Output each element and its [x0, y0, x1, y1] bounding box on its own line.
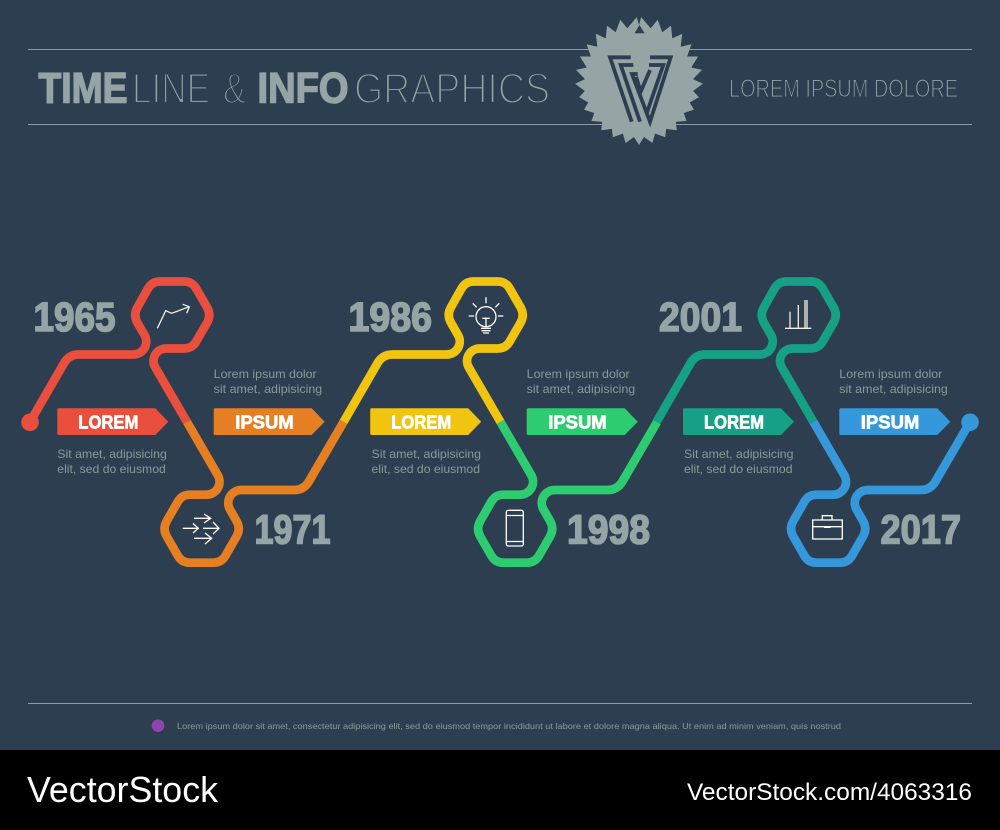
- year 2017: 2017: [880, 506, 961, 552]
- text block below red: elit, sed do eiusmod: [57, 462, 166, 476]
- timeline segment: green 1998: [478, 422, 657, 563]
- text block above orange: sit amet, adipisicing: [214, 382, 322, 396]
- label arrow: teal LOREM: LOREM: [704, 411, 764, 432]
- text block below teal: elit, sed do eiusmod: [684, 462, 792, 476]
- icon: arrows: [183, 514, 219, 544]
- title: GRAPHICS: [354, 65, 550, 113]
- title: &: [223, 65, 246, 113]
- label arrow: green IPSUM: IPSUM: [548, 411, 607, 432]
- title: [38, 64, 550, 113]
- watermark bar: VectorStock: [27, 769, 219, 810]
- text block below yellow: elit, sed do eiusmod: [372, 462, 480, 476]
- label arrow: red LOREM: LOREM: [78, 411, 138, 432]
- label arrow: orange IPSUM: [214, 408, 325, 435]
- text block below red: [57, 447, 167, 476]
- label arrow: teal LOREM: [683, 408, 794, 435]
- year 1965: 1965: [34, 294, 116, 340]
- label arrow: yellow LOREM: [370, 408, 481, 435]
- header rule lines: [28, 50, 972, 124]
- text block below yellow: Sit amet, adipisicing: [372, 447, 481, 461]
- icon: light bulb: [469, 297, 503, 333]
- text block below red: Sit amet, adipisicing: [57, 447, 167, 461]
- text block above orange: [214, 367, 322, 396]
- timeline segment: orange 1971: [165, 422, 344, 563]
- watermark bar: VectorStock.com/4063316: [687, 779, 972, 806]
- label arrow: orange IPSUM: IPSUM: [235, 411, 294, 432]
- end dot: [961, 414, 979, 431]
- timeline segment: yellow 1986: [344, 282, 523, 422]
- icon: smartphone: [506, 510, 523, 546]
- text block above blue: Lorem ipsum dolor: [839, 367, 942, 381]
- logo badge: [575, 17, 703, 145]
- text block above orange: Lorem ipsum dolor: [214, 367, 317, 381]
- footer rule: [28, 702, 972, 704]
- year 2001: 2001: [659, 294, 742, 340]
- label arrow: blue IPSUM: IPSUM: [861, 411, 919, 432]
- text block above green: sit amet, adipisicing: [527, 382, 635, 396]
- text block above blue: sit amet, adipisicing: [839, 382, 948, 396]
- title: TIME: [38, 64, 128, 112]
- title: LINE: [132, 65, 210, 113]
- text block above green: Lorem ipsum dolor: [527, 367, 630, 381]
- text block below yellow: [372, 447, 481, 476]
- footer text: Lorem ipsum dolor sit amet, consectetur adipisicing elit, sed do eiusmod tempor incididunt ut labore et dolore magna aliqua. Ut enim ad minim veniam, quis nostrud: [177, 721, 841, 731]
- timeline segment: teal 2001: [656, 282, 836, 422]
- text block below teal: Sit amet, adipisicing: [684, 447, 794, 461]
- timeline segment: red 1965: [30, 282, 209, 422]
- icon: briefcase: [813, 516, 842, 539]
- text block below teal: [684, 447, 794, 476]
- text block above green: [527, 367, 635, 396]
- year 1998: 1998: [567, 506, 650, 552]
- title: INFO: [258, 64, 348, 112]
- icon: bar chart: [785, 300, 811, 328]
- timeline segment: blue 2017: [791, 422, 970, 563]
- watermark bar: [0, 750, 1000, 830]
- label arrow: yellow LOREM: LOREM: [391, 411, 451, 432]
- label arrow: green IPSUM: [527, 408, 638, 435]
- label arrow: red LOREM: [57, 408, 168, 435]
- start dot: [21, 414, 39, 431]
- text block above blue: [839, 367, 948, 396]
- label arrow: blue IPSUM: [839, 408, 950, 435]
- year 1986: 1986: [348, 294, 432, 340]
- year 1971: 1971: [254, 506, 330, 552]
- icon: rising chart arrow: [157, 304, 189, 328]
- footer purple dot: [152, 719, 164, 732]
